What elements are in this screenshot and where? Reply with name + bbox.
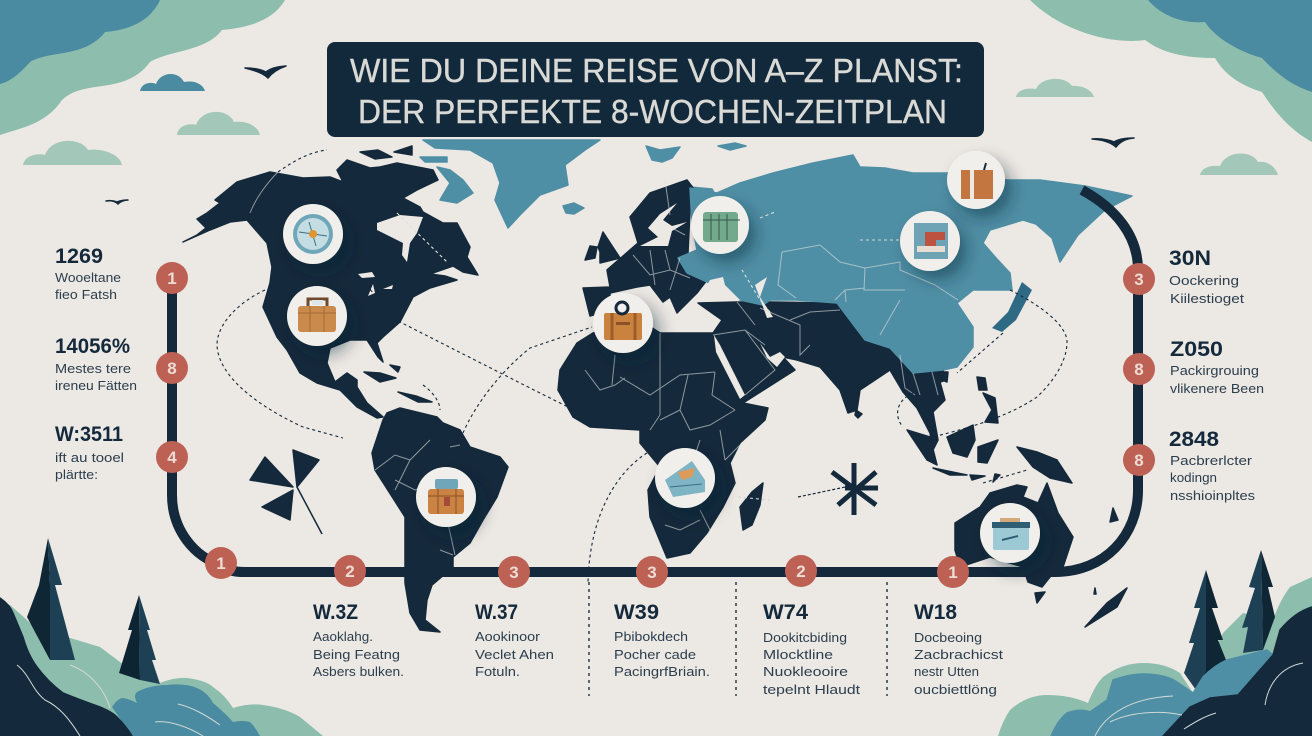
title banner bbox=[327, 42, 984, 137]
map: UK and Ireland bbox=[585, 232, 620, 263]
step text 6: 2848 bbox=[1169, 428, 1219, 451]
map: Madagascar, New Zealand, Tasmania, Sri Lanka bbox=[740, 410, 1127, 627]
map: Australia bbox=[955, 483, 1073, 587]
step text W18 bbox=[914, 601, 1003, 697]
icon: bag south america bbox=[416, 467, 476, 527]
step text 3: W:3511 bbox=[55, 423, 123, 446]
map: South America bbox=[372, 408, 508, 632]
map: Europe bbox=[583, 180, 707, 316]
step marker: 8 bbox=[1134, 360, 1144, 379]
step text W18: Docbeoing bbox=[914, 630, 982, 645]
map: Africa, Middle East and South Asia bbox=[558, 302, 947, 558]
step text 2: Mestes tere bbox=[55, 361, 131, 376]
map: Indonesia and Philippines bbox=[907, 372, 1072, 483]
step text 2 bbox=[55, 335, 137, 393]
step text 3: plärtte: bbox=[55, 467, 98, 482]
step text W39 bbox=[614, 601, 710, 679]
step text W74: Mlocktline bbox=[763, 647, 833, 662]
step text 3 bbox=[55, 423, 124, 482]
step text 6: Pacbrerlcter bbox=[1170, 453, 1253, 468]
step marker: 8 bbox=[167, 359, 177, 378]
step text 4 bbox=[1169, 247, 1244, 306]
step text 6: nsshioinpltes bbox=[1170, 488, 1256, 503]
world map bbox=[183, 140, 1132, 632]
map: Arctic and Caribbean islands bbox=[360, 146, 432, 402]
icon: green case bbox=[691, 196, 749, 254]
bottom timeline steps bbox=[205, 547, 1003, 697]
step text W74: tepelnt Hlaudt bbox=[763, 682, 860, 697]
decorative pinwheel star bbox=[250, 450, 322, 534]
step marker bbox=[156, 441, 188, 473]
icon: documents africa bbox=[655, 448, 715, 508]
map: North America bbox=[183, 160, 478, 418]
icon: brown wallet bbox=[947, 151, 1005, 209]
step marker: 1 bbox=[167, 269, 177, 288]
step marker bbox=[156, 262, 188, 294]
map: Japan bbox=[992, 282, 1032, 332]
step marker bbox=[498, 556, 530, 588]
step text W39: Pocher cade bbox=[614, 647, 696, 662]
step marker: 1 bbox=[948, 563, 958, 582]
map: Red Sea and Persian Gulf bbox=[714, 335, 785, 399]
icon: box australia bbox=[980, 503, 1040, 563]
tree bbox=[1242, 550, 1275, 653]
step text 1: Wooeltane bbox=[55, 270, 121, 285]
step text W.37: Aookinoor bbox=[475, 629, 541, 644]
icon: suitcase africa bbox=[593, 293, 653, 353]
step text W39: W39 bbox=[614, 601, 659, 624]
map: Black Sea and Caspian bbox=[700, 277, 773, 318]
step text W74: W74 bbox=[763, 601, 808, 624]
step text 5 bbox=[1170, 338, 1264, 396]
title banner: DER PERFEKTE 8-WOCHEN-ZEITPLAN bbox=[358, 93, 947, 130]
step text W.37: Veclet Ahen bbox=[475, 647, 554, 662]
tree bbox=[27, 538, 75, 660]
step text W18: oucbiettlöng bbox=[914, 682, 997, 697]
step marker bbox=[334, 555, 366, 587]
step text 3: ift au tooel bbox=[55, 450, 124, 465]
step marker bbox=[1123, 263, 1155, 295]
step text W39: Pbibokdech bbox=[614, 629, 688, 644]
decorative asterisk star bbox=[798, 463, 878, 515]
step marker: 3 bbox=[509, 563, 519, 582]
map: Baltic Sea bbox=[640, 203, 687, 246]
step marker: 2 bbox=[796, 562, 806, 581]
step text W74: Dookitcbiding bbox=[763, 630, 847, 645]
tree bbox=[119, 595, 160, 684]
small clouds and birds bbox=[23, 66, 1278, 204]
step text 2: 14056% bbox=[55, 335, 130, 358]
icon: suitcase north america bbox=[287, 286, 347, 346]
map: country borders bbox=[250, 172, 958, 555]
corner clouds: top left bbox=[0, 0, 285, 135]
step marker bbox=[785, 555, 817, 587]
step marker bbox=[205, 547, 237, 579]
step marker: 1 bbox=[216, 554, 226, 573]
step text W.3Z: Aaoklahg. bbox=[313, 629, 373, 644]
right timeline steps bbox=[1123, 247, 1264, 503]
dashed travel routes bbox=[217, 150, 1067, 582]
step text W18: W18 bbox=[914, 601, 957, 624]
step text W.37: W.37 bbox=[475, 601, 518, 624]
step text 4: Oockering bbox=[1169, 273, 1239, 288]
step marker: 3 bbox=[647, 563, 657, 582]
step text 1 bbox=[55, 245, 121, 302]
corner landscape: bottom left bbox=[0, 538, 323, 736]
icon: book bbox=[900, 211, 960, 271]
step text W74 bbox=[763, 601, 860, 697]
step marker: 8 bbox=[1134, 451, 1144, 470]
step text 4: Kiilestioget bbox=[1170, 291, 1244, 306]
step marker bbox=[1123, 444, 1155, 476]
step marker bbox=[937, 556, 969, 588]
step text 6 bbox=[1169, 428, 1256, 503]
tree bbox=[1184, 570, 1226, 690]
step text 6: kodingn bbox=[1170, 470, 1217, 485]
step marker: 3 bbox=[1134, 270, 1144, 289]
step text W18: nestr Utten bbox=[914, 664, 979, 679]
corner landscape: bottom right bbox=[998, 550, 1312, 736]
icon: compass bbox=[283, 204, 343, 264]
map: Greenland and Arctic islands bbox=[420, 140, 746, 228]
step marker bbox=[1123, 353, 1155, 385]
map: Hudson Bay bbox=[377, 215, 423, 262]
step text W.3Z: W.3Z bbox=[313, 601, 358, 624]
step text 5: vlikenere Been bbox=[1170, 381, 1264, 396]
step text 1: fieo Fatsh bbox=[55, 287, 117, 302]
title banner: WIE DU DEINE REISE VON A–Z PLANST: bbox=[350, 52, 963, 89]
step marker: 2 bbox=[345, 562, 355, 581]
map: Russia and Asia bbox=[678, 155, 1132, 373]
step text W.37 bbox=[475, 601, 554, 679]
step text 5: Packirgrouing bbox=[1170, 363, 1259, 378]
step text W.3Z: Being Featng bbox=[313, 647, 400, 662]
step text W.3Z bbox=[313, 601, 404, 679]
step text 1: 1269 bbox=[55, 245, 103, 268]
timeline track bbox=[172, 190, 1138, 572]
step text W18: Zacbrachicst bbox=[914, 647, 1003, 662]
corner clouds: top right bbox=[1030, 0, 1312, 142]
map: Great Lakes bbox=[358, 272, 393, 296]
step marker bbox=[636, 556, 668, 588]
step text 5: Z050 bbox=[1170, 338, 1223, 361]
step text W39: PacingrfBriain. bbox=[614, 664, 710, 679]
step text 4: 30N bbox=[1169, 247, 1211, 270]
step text W.37: Fotuln. bbox=[475, 664, 520, 679]
step marker bbox=[156, 352, 188, 384]
step text W.3Z: Asbers bulken. bbox=[313, 664, 404, 679]
step text 2: ireneu Fätten bbox=[55, 378, 137, 393]
step marker: 4 bbox=[167, 448, 177, 467]
left timeline steps bbox=[55, 245, 188, 482]
step text W74: Nuokleooire bbox=[763, 664, 848, 679]
